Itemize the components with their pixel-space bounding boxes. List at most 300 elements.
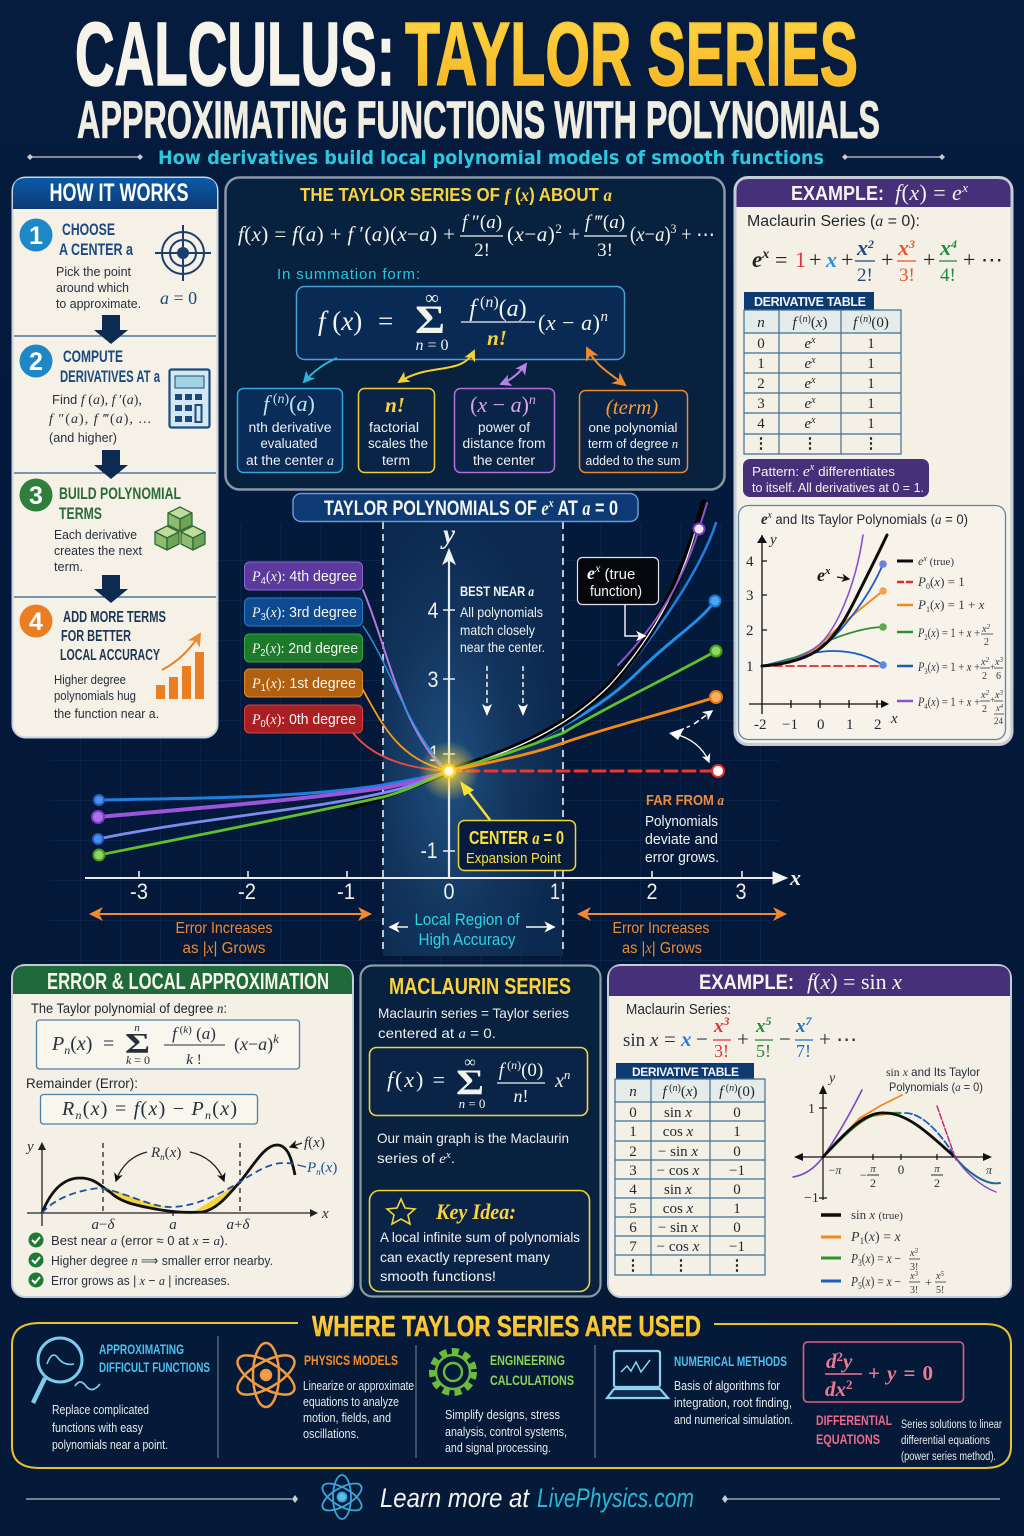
chart: e^x and taylor polynomials: e bbox=[761, 511, 768, 528]
chart legend: 3 bbox=[998, 656, 1003, 664]
step 3: BUILD POLYNOMIAL bbox=[59, 485, 181, 503]
taylor polynomial formula: P bbox=[51, 1033, 64, 1055]
derivative table: 1 bbox=[757, 356, 765, 372]
panel: error and local approximation bbox=[12, 965, 353, 1297]
chart legend: x bbox=[981, 690, 985, 701]
chart legend: x bbox=[922, 554, 927, 563]
chart: error: x) bbox=[326, 1160, 337, 1176]
derivative table: ⋮ bbox=[754, 436, 768, 452]
series text: 3 bbox=[908, 237, 915, 251]
general formula: (x−a) bbox=[507, 222, 555, 246]
chart legend: P bbox=[850, 1275, 858, 1290]
summation formula box: (x − a) bbox=[538, 310, 600, 335]
axis labels: 4 bbox=[428, 598, 438, 623]
chart: error: a+δ bbox=[227, 1217, 250, 1233]
chart legend: ( bbox=[862, 1252, 866, 1267]
derivative table: x bbox=[810, 335, 816, 346]
footer: Learn more at bbox=[380, 1483, 530, 1513]
chart legend: x bbox=[996, 703, 1000, 713]
chart: e^x and taylor polynomials: 1 bbox=[746, 659, 754, 675]
chart legend: 6 bbox=[996, 671, 1001, 682]
series text: + bbox=[841, 247, 853, 272]
step 2: 2 bbox=[29, 348, 43, 376]
chart: error: a bbox=[169, 1217, 177, 1233]
derivative table: e bbox=[804, 356, 811, 372]
annotation: far from a: error grows. bbox=[645, 850, 719, 866]
chart legend: x bbox=[995, 657, 999, 668]
axes bbox=[85, 549, 787, 884]
chart: sin x and taylor polynomials: 2 bbox=[934, 1176, 940, 1190]
general formula: f(x) = f(a) + f ′(a)(x−a) + bbox=[238, 222, 455, 246]
chart: e^x and taylor polynomials: 2 bbox=[874, 717, 882, 733]
key idea box: Key Idea: bbox=[435, 1199, 516, 1224]
axis labels: -2 bbox=[238, 879, 256, 904]
chart legend: x bbox=[936, 1271, 940, 1282]
step 3 bbox=[20, 478, 205, 574]
legend: degree labels: 0 bbox=[261, 719, 266, 730]
derivative table: DERIVATIVE TABLE bbox=[754, 295, 866, 309]
legend: degree labels: 3 bbox=[261, 612, 266, 623]
callout: nth derivative: (n) bbox=[273, 392, 289, 407]
arrow bbox=[94, 315, 128, 344]
heading: ERROR & LOCAL APPROXIMATION bbox=[47, 968, 329, 994]
chart legend: 4 bbox=[1000, 703, 1003, 710]
chart legend: 4 bbox=[924, 702, 928, 711]
callout: power of distance: power of bbox=[478, 420, 530, 435]
annotation: error increases right bbox=[579, 914, 785, 957]
formula box bbox=[370, 1048, 588, 1116]
chart legend: 2 bbox=[986, 623, 990, 631]
icon: star bbox=[387, 1199, 415, 1224]
formula box: (0) bbox=[521, 1060, 543, 1081]
chart: error: n bbox=[316, 1167, 321, 1177]
use: engineering bbox=[432, 1351, 574, 1455]
step 4: LOCAL ACCURACY bbox=[60, 647, 160, 664]
use: numerical: NUMERICAL METHODS bbox=[674, 1353, 787, 1369]
taylor polynomial formula: n bbox=[64, 1043, 70, 1057]
series: x bbox=[714, 1016, 724, 1037]
chart: sin x and taylor polynomials: 2 bbox=[870, 1176, 876, 1190]
step 4: 4 bbox=[29, 608, 43, 636]
chart: e^x and taylor polynomials: and Its Taylor Polynomials ( bbox=[772, 511, 935, 527]
step 2: (and higher) bbox=[49, 430, 117, 445]
remainder formula: R bbox=[61, 1098, 74, 1120]
note: x bbox=[445, 1150, 451, 1161]
general formula: 3 bbox=[671, 221, 676, 236]
chart: e^x and taylor polynomials: 3 bbox=[746, 588, 754, 604]
chart legend: 1 bbox=[860, 1236, 864, 1246]
chart: sin x and taylor polynomials bbox=[793, 1065, 1000, 1296]
step 1: around which bbox=[56, 280, 129, 295]
derivative table: 1 bbox=[867, 376, 875, 392]
callout: true function: x bbox=[594, 561, 601, 575]
callout: power of distance: n bbox=[529, 393, 536, 408]
formula box: Σ bbox=[456, 1062, 484, 1102]
remainder formula: x) bbox=[220, 1098, 237, 1120]
series: x bbox=[796, 1016, 806, 1037]
chart: sin x and taylor polynomials: sin x and Its Taylor bbox=[886, 1065, 980, 1079]
annotation: error increases left bbox=[91, 914, 370, 957]
derivative table: 1 bbox=[733, 1124, 741, 1140]
icon: growth bars bbox=[156, 634, 204, 699]
derivative table: x bbox=[810, 395, 816, 406]
step 4: the function near a. bbox=[54, 706, 159, 721]
series text: = bbox=[775, 247, 787, 272]
taylor polynomial formula: (x−a) bbox=[234, 1034, 273, 1054]
axis labels: 2 bbox=[646, 879, 658, 904]
use: engineering: and signal processing. bbox=[445, 1440, 551, 1455]
heading: MACLAURIN SERIES bbox=[389, 973, 571, 999]
derivative table: x bbox=[810, 355, 816, 366]
callout: pattern: differentiates bbox=[814, 464, 896, 479]
chart legend: 3! bbox=[910, 1285, 918, 1296]
chart: e^x and taylor polynomials: x bbox=[767, 510, 772, 521]
axis labels: -3 bbox=[130, 879, 148, 904]
remainder formula: x) = f(x) − P bbox=[91, 1098, 204, 1120]
chart: sin x and taylor polynomials: Polynomials (a = 0) bbox=[889, 1080, 983, 1094]
use: approximating: DIFFICULT FUNCTIONS bbox=[99, 1359, 210, 1375]
series text: x bbox=[898, 235, 909, 260]
chart legend: x bbox=[995, 690, 999, 701]
callout: true function bbox=[578, 558, 658, 636]
legend: degree labels: 1 bbox=[261, 683, 266, 694]
taylor polynomial formula: k bbox=[273, 1031, 279, 1046]
use: differential equations: EQUATIONS bbox=[816, 1431, 880, 1447]
derivative table: 6 bbox=[629, 1220, 637, 1236]
key idea box: smooth functions! bbox=[380, 1268, 496, 1284]
chart: e^x and taylor polynomials: x bbox=[890, 711, 898, 727]
summation formula box: n bbox=[600, 309, 608, 325]
callout: pattern: x bbox=[809, 462, 815, 473]
chart: e^x and taylor polynomials: 1 bbox=[846, 717, 854, 733]
remainder formula: Remainder (Error): bbox=[26, 1075, 138, 1091]
chart legend: (true) bbox=[927, 556, 954, 568]
use: differential equations: DIFFERENTIAL bbox=[816, 1412, 892, 1428]
derivative table: ( bbox=[811, 315, 816, 331]
chart legend: ( bbox=[864, 1230, 869, 1245]
use: physics: oscillations. bbox=[303, 1426, 359, 1441]
callout: power of distance: (x − a) bbox=[470, 392, 529, 417]
axis labels: 3 bbox=[736, 879, 746, 904]
legend: degree labels: x): 2nd degree bbox=[270, 640, 365, 657]
checklist bbox=[28, 1232, 273, 1288]
chart: sin x and taylor polynomials: − bbox=[860, 1168, 867, 1182]
legend: degree labels: ( bbox=[266, 605, 270, 621]
heading: EXAMPLE: bbox=[791, 183, 884, 205]
formula box: f bbox=[499, 1060, 507, 1081]
summation formula box: (n) bbox=[480, 294, 499, 311]
legend: degree labels: x): 3rd degree bbox=[270, 604, 362, 621]
formula box: ∞ bbox=[464, 1054, 476, 1071]
derivative table: 3 bbox=[757, 396, 765, 412]
note: Our main graph is the Maclaurin bbox=[377, 1130, 569, 1146]
callout: power of distance: distance from bbox=[462, 436, 546, 451]
axis labels: y bbox=[440, 519, 456, 549]
taylor polynomial formula: ( bbox=[70, 1033, 77, 1055]
chart: sin x and taylor polynomials: π bbox=[934, 1163, 940, 1175]
use: physics bbox=[232, 1343, 414, 1441]
series text: x bbox=[857, 235, 868, 260]
series text: 3! bbox=[899, 265, 915, 286]
annotation: best near a: match closely bbox=[460, 622, 535, 638]
taylor polynomial formula: = bbox=[103, 1033, 114, 1055]
use: approximating: Replace complicated bbox=[52, 1402, 149, 1417]
formula box: n bbox=[564, 1067, 570, 1082]
derivative table bbox=[615, 1063, 765, 1275]
callout: true function: function) bbox=[590, 583, 642, 600]
chart: e^x and taylor polynomials: 4 bbox=[746, 554, 754, 570]
use: differential equations: y bbox=[840, 1349, 853, 1373]
use: differential equations: 2 bbox=[846, 1377, 852, 1392]
chart: e^x and taylor polynomials: 0 bbox=[817, 717, 824, 733]
callout: true function: (true bbox=[600, 566, 635, 583]
chart: sin x and taylor polynomials: π bbox=[986, 1163, 993, 1177]
chart legend: P bbox=[850, 1252, 858, 1267]
general formula: 2 bbox=[555, 221, 562, 236]
derivative table: 7 bbox=[629, 1239, 637, 1255]
derivative table: (n) bbox=[669, 1083, 681, 1094]
series: + bbox=[737, 1027, 749, 1051]
chart legend: P bbox=[850, 1230, 860, 1245]
taylor polynomial formula: Σ bbox=[125, 1029, 150, 1060]
definition bbox=[378, 1005, 569, 1042]
polynomial curves bbox=[98, 503, 718, 855]
step 1: a = 0 bbox=[160, 288, 197, 308]
tagline: How derivatives build local polynomial models of smooth functions bbox=[158, 147, 824, 169]
chart legend: 3! bbox=[910, 1262, 918, 1273]
axis labels: -1 bbox=[337, 879, 355, 904]
use: physics: PHYSICS MODELS bbox=[304, 1352, 398, 1368]
derivative table: (0) bbox=[737, 1084, 755, 1100]
callout: center point: Expansion Point bbox=[466, 850, 562, 867]
derivative table: n bbox=[629, 1084, 637, 1100]
derivative table: 0 bbox=[757, 336, 765, 352]
panel: taylor series formula bbox=[226, 178, 724, 490]
derivative table: 1 bbox=[867, 416, 875, 432]
series: − bbox=[696, 1027, 708, 1051]
callout: power of distance: the center bbox=[473, 453, 536, 468]
derivative table: − cos x bbox=[657, 1163, 700, 1179]
remainder formula: ( bbox=[83, 1098, 90, 1120]
use: approximating: functions with easy bbox=[52, 1420, 143, 1435]
step 1: A CENTER a bbox=[59, 240, 133, 259]
derivative table: 0 bbox=[733, 1182, 741, 1198]
chart legend: + bbox=[990, 662, 995, 672]
axis labels: 1 bbox=[550, 879, 560, 904]
series text: 1 bbox=[795, 247, 806, 272]
chart legend: P bbox=[917, 574, 926, 589]
series: 7! bbox=[796, 1041, 811, 1061]
legend: degree labels: ( bbox=[266, 641, 270, 657]
annotation: far from a: FAR FROM a bbox=[646, 792, 724, 809]
annotation: best near a: BEST NEAR a bbox=[460, 583, 534, 600]
use: engineering: CALCULATIONS bbox=[490, 1372, 574, 1388]
chart: error: ( bbox=[165, 1145, 170, 1161]
derivative table: ⋮ bbox=[674, 1258, 688, 1274]
derivative table: 2 bbox=[629, 1144, 637, 1160]
remainder formula: n bbox=[75, 1108, 81, 1122]
derivative table: − sin x bbox=[658, 1220, 698, 1236]
callout: power of distance bbox=[454, 388, 554, 472]
derivative table: DERIVATIVE TABLE bbox=[632, 1065, 739, 1079]
summation formula box bbox=[296, 286, 624, 360]
use: differential equations: (power series method). bbox=[901, 1451, 996, 1463]
annotation: error increases left: Error Increases bbox=[176, 920, 272, 937]
legend: degree labels: P bbox=[251, 605, 261, 621]
derivative table: 1 bbox=[733, 1201, 741, 1217]
panel: example e^x bbox=[735, 178, 1012, 744]
chart: error: f(x) bbox=[304, 1135, 325, 1151]
chart legend: x) = 1 bbox=[934, 574, 965, 589]
checklist: Higher degree n ⟹ smaller error nearby. bbox=[51, 1253, 273, 1268]
callout: factorial: factorial bbox=[369, 420, 419, 435]
summation formula box: n = 0 bbox=[415, 337, 449, 354]
remainder formula: ( bbox=[212, 1098, 219, 1120]
callout: term bbox=[580, 390, 688, 472]
chart legend: 3 bbox=[998, 689, 1003, 697]
legend: degree labels: P bbox=[251, 712, 261, 728]
chart legend: 2 bbox=[985, 656, 989, 664]
chart legend: ( bbox=[928, 625, 931, 640]
annotation: best near a: near the center. bbox=[460, 639, 545, 655]
chart: error: n bbox=[160, 1152, 165, 1162]
note: series of e bbox=[377, 1150, 445, 1167]
series: = bbox=[664, 1027, 676, 1051]
chart: sin x and taylor polynomials: 0 bbox=[898, 1162, 904, 1177]
chart legend: x bbox=[910, 1248, 914, 1259]
annotation: far from a: Polynomials bbox=[645, 814, 718, 830]
use: numerical: and numerical simulation. bbox=[674, 1412, 793, 1427]
formula box: (n) bbox=[507, 1058, 521, 1072]
derivative table: f bbox=[853, 315, 859, 331]
series: x bbox=[680, 1027, 692, 1051]
heading: WHERE TAYLOR SERIES ARE USED bbox=[312, 1311, 701, 1343]
use: differential equations: d bbox=[826, 1349, 837, 1373]
chart: sin x and taylor polynomials: −1 bbox=[804, 1191, 819, 1206]
panel: how it works bbox=[12, 178, 218, 738]
series text: x bbox=[761, 247, 769, 262]
derivative table: f bbox=[792, 315, 798, 331]
chart legend: P bbox=[917, 597, 926, 612]
panel: maclaurin series bbox=[360, 966, 600, 1296]
taylor polynomial formula: n bbox=[134, 1022, 140, 1034]
step 1 bbox=[20, 218, 211, 311]
chart legend: x) = 1 + x + bbox=[931, 625, 982, 640]
checklist: Best near a (error ≈ 0 at x = a). bbox=[51, 1233, 228, 1248]
derivative table: ⋮ bbox=[730, 1258, 744, 1274]
series: 3! bbox=[714, 1041, 729, 1061]
heading: THE TAYLOR SERIES OF f (x) ABOUT a bbox=[300, 185, 612, 205]
chart legend: 3 bbox=[858, 1258, 862, 1268]
derivative table: 0 bbox=[629, 1105, 637, 1121]
series: 7 bbox=[806, 1014, 812, 1028]
footer bbox=[26, 1475, 1000, 1519]
chart legend: ( bbox=[930, 574, 934, 589]
step 3: creates the next bbox=[54, 543, 142, 558]
graph heading bbox=[293, 494, 638, 522]
taylor polynomial formula: (k) bbox=[180, 1024, 192, 1036]
derivative table: f bbox=[662, 1084, 668, 1100]
chart: error: y bbox=[25, 1139, 34, 1155]
derivative table: n bbox=[757, 315, 765, 331]
derivative table: ⋮ bbox=[626, 1258, 640, 1274]
derivative table: ⋮ bbox=[802, 436, 818, 452]
derivative table: x) bbox=[686, 1084, 698, 1100]
step 2 bbox=[20, 344, 210, 445]
main graph: taylor polynomials of e^x bbox=[85, 494, 801, 957]
derivative table: 0 bbox=[733, 1220, 741, 1236]
formula box: n = 0 bbox=[459, 1096, 485, 1111]
step 2: Find f (a), f ′(a), bbox=[52, 392, 142, 408]
series: x bbox=[756, 1016, 766, 1037]
series text: e bbox=[752, 247, 762, 272]
chart: error: P bbox=[306, 1160, 316, 1176]
summation formula box: f bbox=[469, 296, 479, 322]
chart legend: e bbox=[918, 554, 924, 568]
step 2: DERIVATIVES AT a bbox=[60, 368, 161, 386]
callout: nth derivative: at the center a bbox=[246, 453, 334, 468]
chart legend: 3 bbox=[924, 667, 928, 676]
series bbox=[623, 1002, 857, 1061]
chart legend: + bbox=[925, 1275, 932, 1289]
series: Maclaurin Series: bbox=[626, 1002, 731, 1018]
annotation: local region bbox=[390, 910, 554, 949]
step 3: term. bbox=[54, 559, 83, 574]
derivative table: e bbox=[804, 416, 811, 432]
series: 5 bbox=[766, 1014, 772, 1028]
footer: LivePhysics.com bbox=[537, 1483, 694, 1513]
chart legend: x) = x − bbox=[866, 1275, 903, 1290]
series text: x bbox=[940, 235, 951, 260]
derivative table: x bbox=[810, 415, 816, 426]
derivative table: 1 bbox=[867, 396, 875, 412]
derivative table: 0 bbox=[733, 1144, 741, 1160]
derivative table: 3 bbox=[629, 1163, 637, 1179]
chart legend: 5 bbox=[858, 1281, 862, 1291]
callout: pattern bbox=[743, 459, 929, 497]
legend: degree labels: P bbox=[251, 569, 261, 585]
axis labels: 0 bbox=[444, 879, 454, 904]
chart legend: ( bbox=[928, 694, 931, 709]
chart: sin x and taylor polynomials: −π bbox=[829, 1163, 842, 1177]
derivative table: (n) bbox=[860, 314, 871, 325]
chart: sin x and taylor polynomials: 1 bbox=[808, 1102, 815, 1117]
summation formula box: a) bbox=[507, 296, 527, 322]
derivative table bbox=[744, 292, 901, 454]
series text: x bbox=[825, 247, 837, 272]
series text: 2! bbox=[857, 265, 873, 286]
derivative table: sin x bbox=[664, 1182, 692, 1198]
chart legend: 3 bbox=[913, 1247, 918, 1255]
chart: e^x and taylor polynomials bbox=[738, 506, 1006, 740]
step 2: COMPUTE bbox=[63, 348, 123, 366]
taylor polynomial formula: k ! bbox=[186, 1052, 202, 1068]
note: . bbox=[451, 1150, 455, 1166]
panel: example e^x: x bbox=[961, 180, 968, 195]
callout: term: one polynomial bbox=[588, 420, 678, 435]
derivative table: cos x bbox=[663, 1201, 694, 1217]
chart legend: x) = x bbox=[869, 1230, 901, 1245]
derivative table: cos x bbox=[663, 1124, 694, 1140]
use: engineering: Simplify designs, stress bbox=[445, 1407, 560, 1422]
legend: degree labels: P bbox=[251, 676, 261, 692]
chart legend: 2 bbox=[982, 671, 987, 682]
formula box: n! bbox=[514, 1086, 528, 1106]
icon: laptop bbox=[607, 1351, 668, 1398]
callout: nth derivative: a) bbox=[296, 391, 315, 416]
chart legend: x) = 1 + x + bbox=[931, 694, 982, 709]
series text: + bbox=[881, 247, 893, 272]
